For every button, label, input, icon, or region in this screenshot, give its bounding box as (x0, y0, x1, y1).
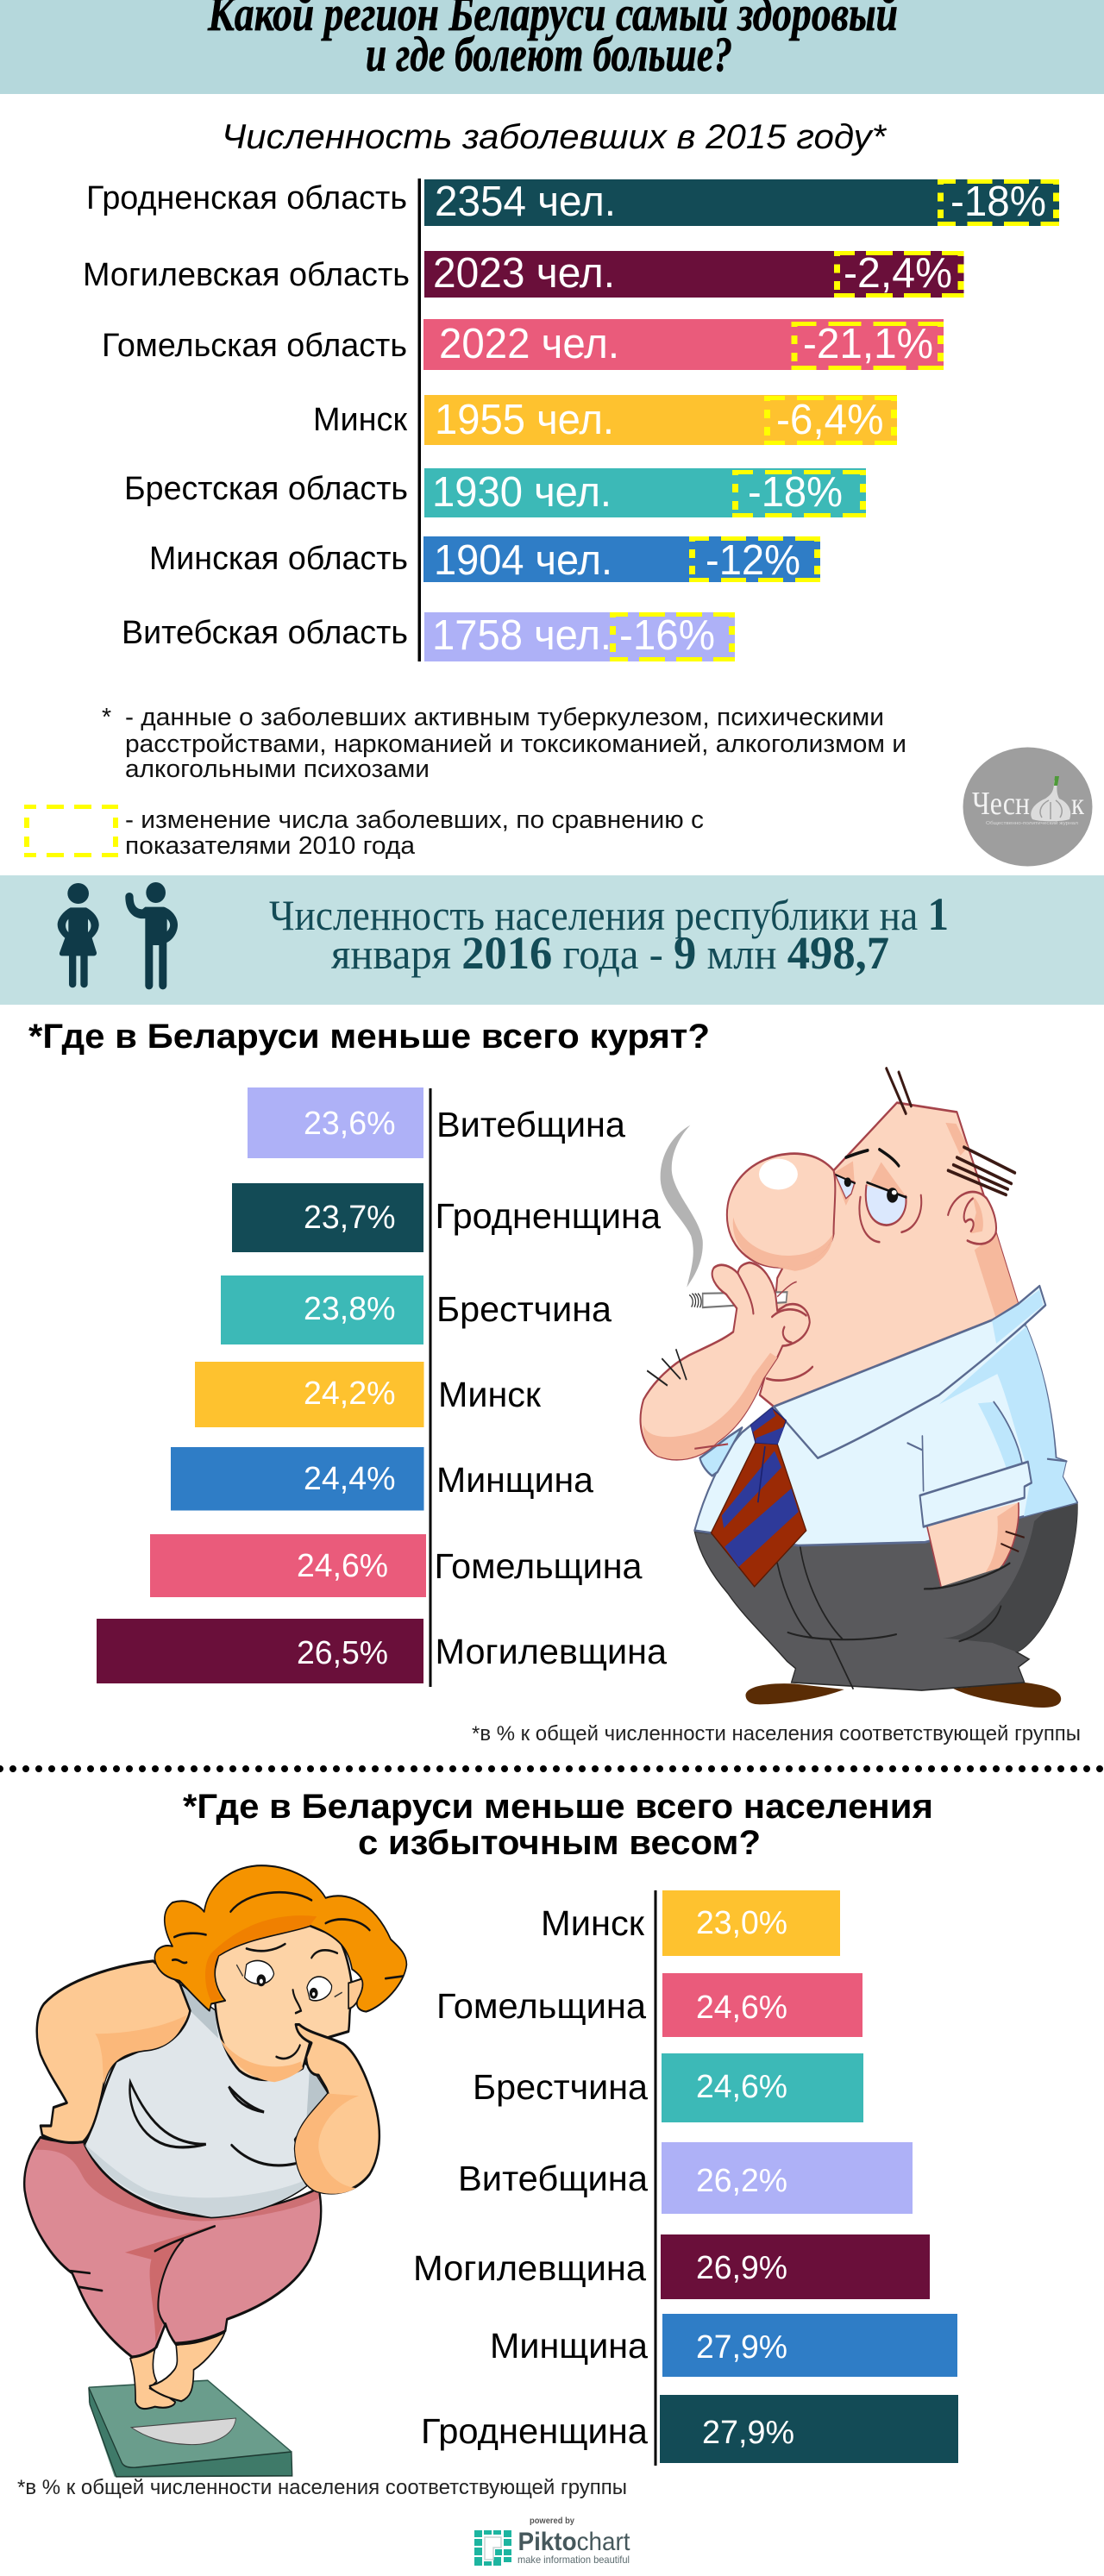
bar: Могилевщина: Могилевщина (435, 1632, 667, 1671)
hair (887, 1069, 1015, 1194)
piktochart logo: powered by (530, 2516, 574, 2526)
bar: Брестчина (473, 2053, 863, 2122)
bar: Витебщина (248, 1087, 625, 1158)
piktochart logo: make information beautiful (518, 2554, 630, 2566)
bar: Гомельщина: 24,6% (297, 1548, 388, 1584)
bar: Минск: Минск (541, 1903, 645, 1943)
row: Витебская область: Витебская область (122, 615, 408, 651)
logo: Чеснок: к (1071, 787, 1084, 821)
heading: excess weight: с избыточным весом? (358, 1824, 761, 1862)
row: Витебская область: -16% (619, 612, 715, 659)
smoke (661, 1125, 703, 1288)
tie (711, 1408, 806, 1587)
row: Брестская область: 1930 чел. (432, 469, 612, 516)
bar: Брестчина (221, 1275, 612, 1344)
row: Минская область: 1904 чел. (434, 537, 612, 584)
row: Гродненская область: -18% (950, 179, 1046, 225)
shirt (694, 1320, 1077, 1545)
heading: smoking: *Где в Беларуси меньше всего курят? (28, 1018, 710, 1056)
row: Могилевская область: -2,4% (844, 250, 952, 297)
bar: Витебщина (458, 2142, 913, 2214)
face (215, 1926, 353, 2080)
bar: Минск: Минск (438, 1375, 542, 1414)
row: Гродненская область: Гродненская область (86, 180, 407, 216)
ear (948, 1192, 996, 1244)
row: Минская область: -12% (706, 537, 800, 584)
nose (727, 1154, 835, 1271)
bar: Брестчина: Брестчина (436, 1289, 612, 1329)
bar: Гомельщина (436, 1973, 862, 2037)
bar: Гродненщина: 23,7% (304, 1200, 395, 1236)
footnote: definition of cases: расстройствами, наркоманией и токсикоманией, алкоголизмом и (125, 730, 906, 758)
legend: dashed box meaning (24, 805, 704, 860)
legend: dashed box meaning: - изменение числа заболевших, по сравнению с (125, 806, 704, 834)
row: Минская область: Минская область (149, 541, 408, 577)
bar: Минск: 24,2% (304, 1376, 395, 1412)
bar: Гомельщина: Гомельщина (436, 1986, 646, 2026)
row: Могилевская область: 2023 чел. (433, 250, 615, 297)
bar: Минск: 23,0% (696, 1905, 787, 1941)
footnote: smoking percentages: *в % к общей численности населения соответствующей группы (472, 1722, 1081, 1746)
header band with title (0, 0, 1104, 94)
row: Минск: -6,4% (776, 397, 883, 443)
cuff (920, 1462, 1032, 1526)
bar: Минщина (171, 1447, 593, 1511)
illustration: woman on scales (24, 1865, 406, 2477)
bar: Гродненщина: Гродненщина (435, 1196, 661, 1236)
bar: Брестчина: 23,8% (304, 1291, 395, 1327)
footnote: definition of cases: - данные о заболевших активным туберкулезом, психическими (125, 704, 884, 731)
title: и где болеют больше? (366, 28, 732, 82)
row: Гомельская область: Гомельская область (102, 328, 407, 364)
row: Минск: Минск (313, 402, 407, 438)
shoes (745, 1683, 1061, 1708)
row: Брестская область (124, 468, 866, 517)
footnote: definition of cases: * (102, 704, 111, 731)
piktochart logo: Piktochart (518, 2528, 630, 2556)
logo: Чеснок: Чесн (972, 786, 1030, 822)
collar (774, 1286, 1045, 1458)
heading: excess weight (183, 1788, 933, 1862)
chart: smoking by region (97, 1087, 667, 1687)
subtitle: number of cases in 2015: Численность заболевших в 2015 году* (222, 118, 887, 156)
sleeve (699, 1427, 742, 1476)
row: Могилевская область: Могилевская область (83, 257, 410, 293)
right arm and hand (295, 2025, 380, 2193)
band: population of the republic (0, 875, 1104, 1005)
row: Минск: 1955 чел. (435, 397, 614, 443)
illustration: smoking man (641, 1069, 1077, 1708)
bar: Брестчина: Брестчина (473, 2067, 648, 2107)
logo: Чеснок (963, 747, 1092, 866)
bar: Минск (195, 1362, 542, 1427)
icon: piktochart mark (474, 2530, 511, 2566)
bar: Гомельщина: 24,6% (696, 1990, 787, 2026)
footnote: weight percentages: *в % к общей численности населения соответствующей группы (17, 2476, 627, 2499)
row: Брестская область: -18% (748, 469, 843, 516)
trousers (24, 2137, 321, 2357)
legend dashed box (24, 805, 118, 857)
heading: excess weight: *Где в Беларуси меньше всего населения (183, 1788, 933, 1826)
piktochart logo (474, 2516, 630, 2566)
population text (269, 888, 949, 979)
footnote: definition of cases: алкогольными психозами (125, 755, 430, 783)
bar: Минщина: 27,9% (696, 2329, 787, 2366)
bar: Могилевщина (97, 1619, 667, 1683)
hair (154, 1865, 406, 2012)
bar: Могилевщина: 26,5% (297, 1635, 388, 1671)
row: Витебская область: 1758 чел. (432, 612, 612, 659)
bar: Витебщина: 23,6% (304, 1106, 395, 1142)
trousers (694, 1502, 1077, 1690)
row: Гродненская область: 2354 чел. (435, 179, 616, 225)
bar: Витебщина: 26,2% (696, 2163, 787, 2199)
bar: Минщина: 24,4% (304, 1461, 395, 1497)
bar: Гомельщина: Гомельщина (435, 1546, 643, 1586)
row: Гродненская область (86, 179, 1059, 226)
bar: Минщина (490, 2314, 957, 2377)
title (207, 0, 898, 82)
bar: Гродненщина: 27,9% (702, 2415, 794, 2451)
row: Минск (313, 395, 897, 445)
bar: Минск (541, 1890, 840, 1956)
chart: excess weight by region (413, 1890, 958, 2466)
population text: января 2016 года - 9 млн 498,7 (331, 927, 889, 979)
legend: dashed box meaning: показателями 2010 года (125, 832, 415, 860)
arm and hand (641, 1263, 810, 1459)
row: Могилевская область (83, 250, 964, 298)
arm in pocket (927, 1502, 1019, 1587)
row: Брестская область: Брестская область (124, 471, 408, 507)
legs (130, 2349, 175, 2409)
bar: Могилевщина: 26,9% (696, 2250, 787, 2286)
scales (89, 2380, 292, 2477)
bar: Витебщина: Витебщина (458, 2159, 648, 2198)
population text: Численность населения республики на 1 (269, 888, 949, 940)
bar: Минщина: Минщина (436, 1460, 593, 1500)
cigarette (689, 1292, 787, 1307)
bar: Брестчина: 24,6% (696, 2069, 787, 2105)
row: Гомельская область (102, 319, 944, 370)
logo: Чеснок: Общественно-политический журнал (986, 820, 1078, 826)
eyes and mouth (236, 1944, 342, 2059)
icon: woman and man (58, 882, 178, 989)
top (85, 1985, 328, 2217)
eyes (834, 1150, 921, 1242)
bar: Гродненщина (421, 2395, 958, 2463)
left arm (37, 1961, 190, 2142)
row: Витебская область (122, 612, 735, 661)
bar: Могилевщина: Могилевщина (413, 2248, 646, 2288)
bar: Гомельщина (150, 1534, 643, 1597)
row: Минская область (149, 536, 820, 584)
row: Гомельская область: -21,1% (803, 321, 933, 367)
head and neck (760, 1103, 1019, 1407)
bar: Витебщина: Витебщина (436, 1105, 625, 1144)
bar: Минщина: Минщина (490, 2326, 648, 2366)
bar: Могилевщина (413, 2234, 930, 2299)
footnote: definition of cases (102, 704, 906, 783)
bar: Гродненщина: Гродненщина (421, 2411, 648, 2451)
chart: cases by region (83, 179, 1059, 661)
row: Гомельская область: 2022 чел. (439, 321, 619, 367)
bar: Гродненщина (232, 1183, 661, 1252)
